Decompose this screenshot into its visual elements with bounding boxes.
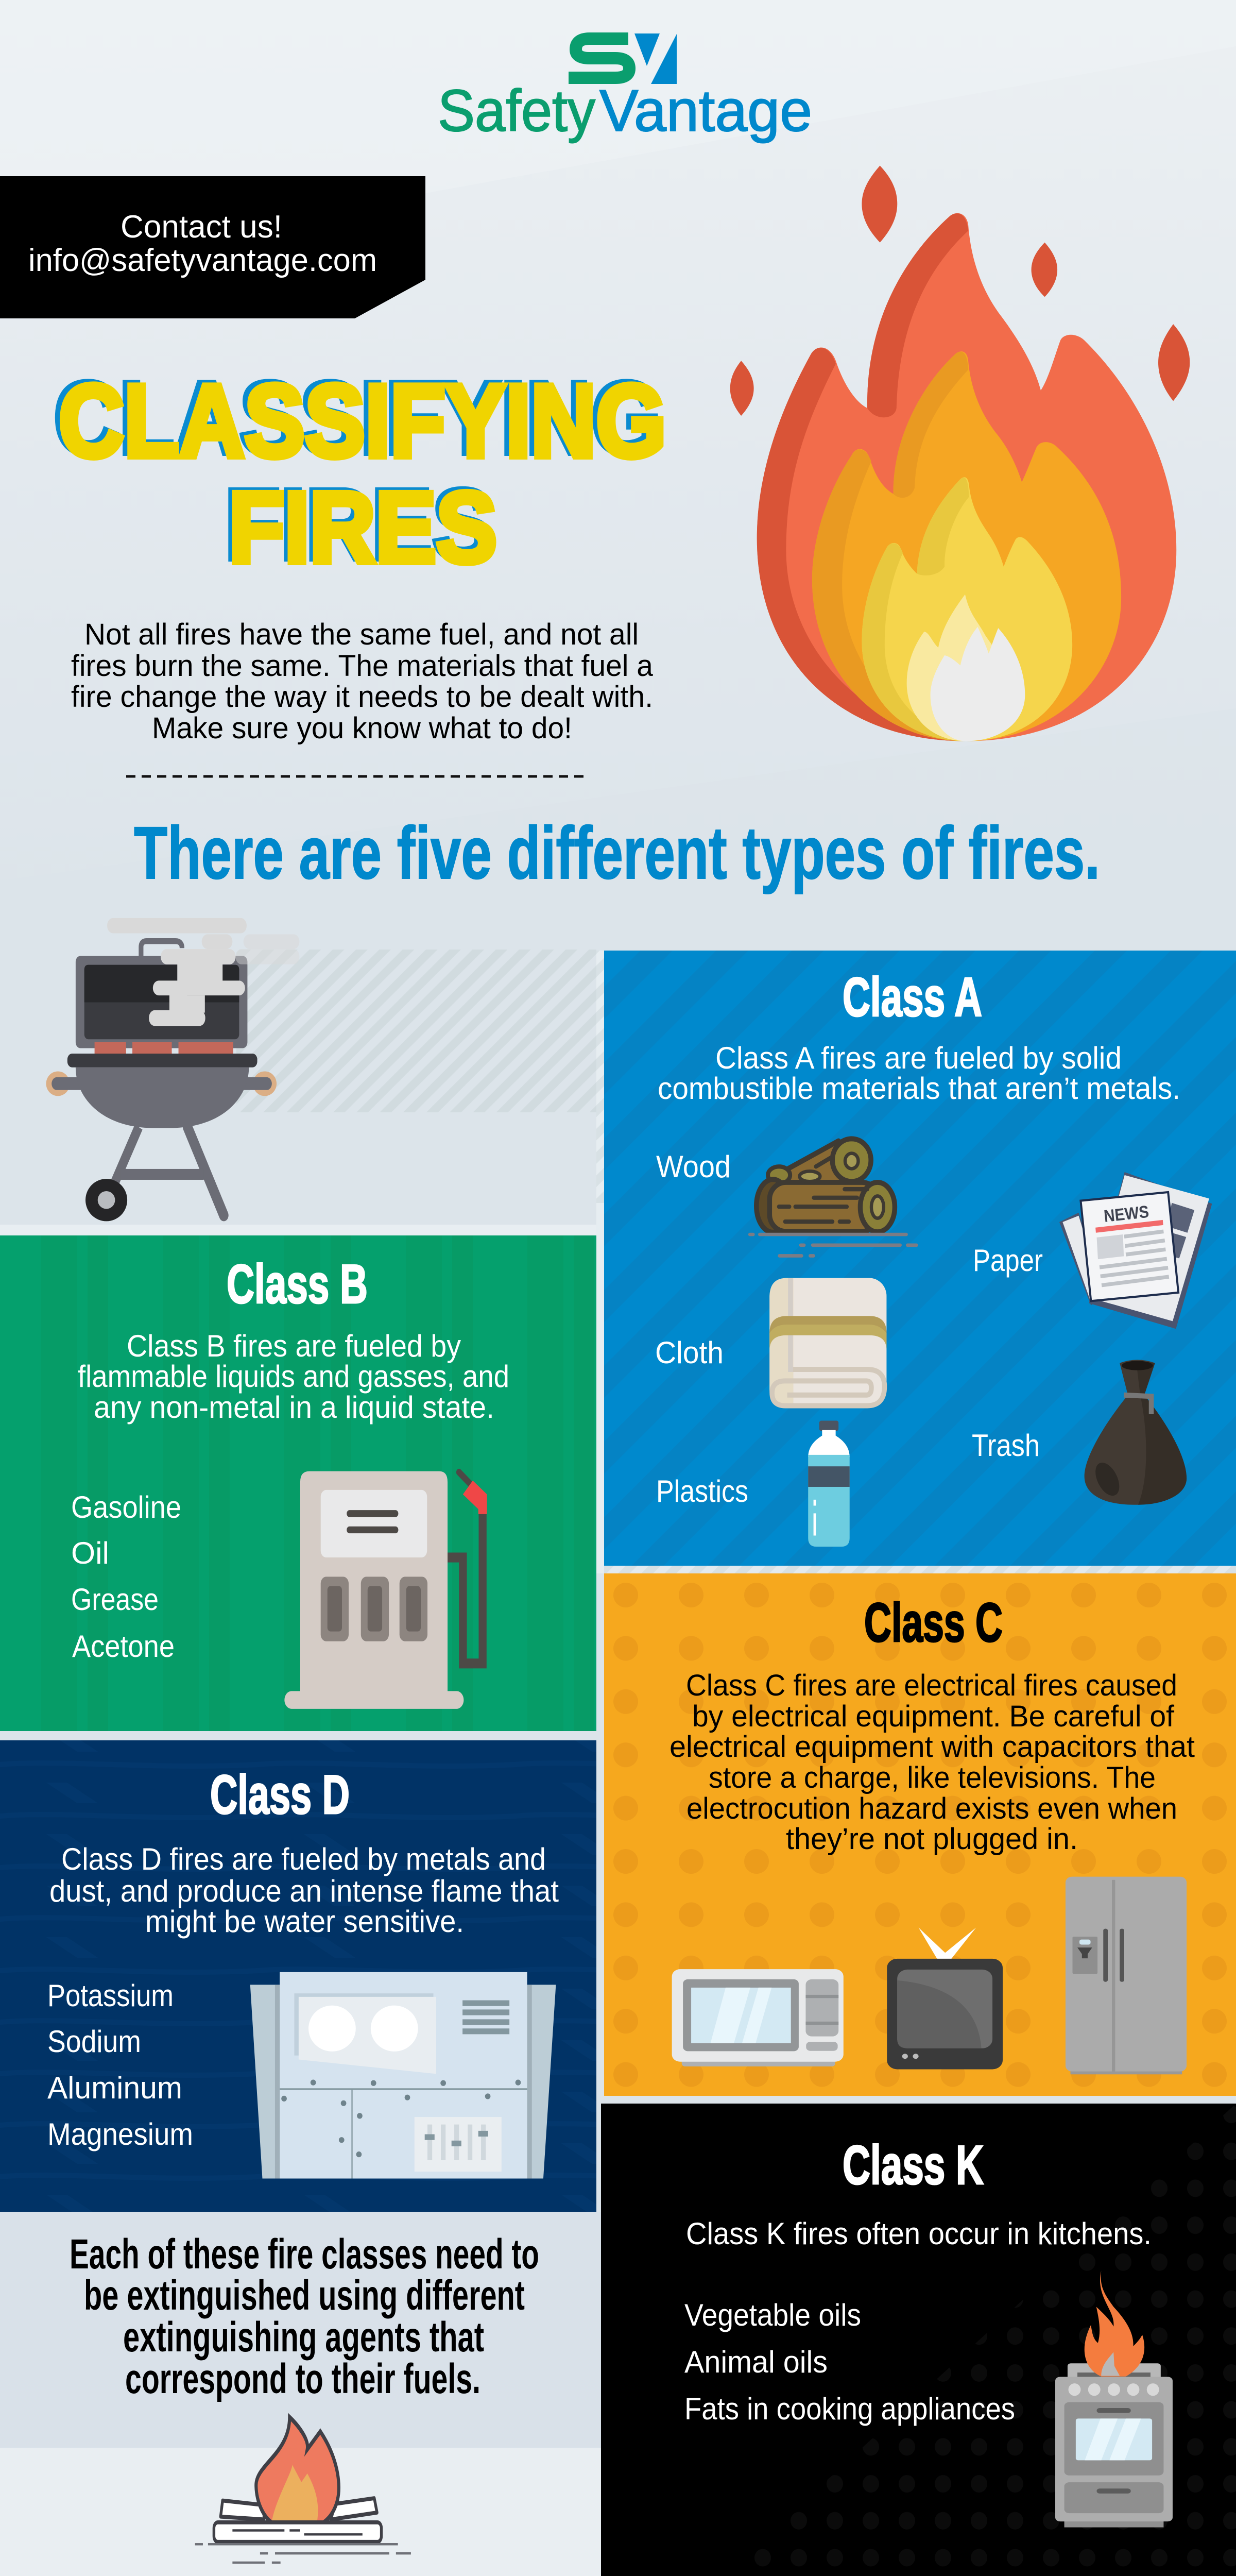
panel: Class A	[604, 951, 1236, 1566]
callout: extinguishing agents: Each of these fire classes need to	[70, 2231, 539, 2278]
icon: fuel pump	[284, 1471, 487, 1709]
title: Classifying Fires	[54, 361, 666, 584]
heading: Class K: Class K	[843, 2134, 984, 2196]
description: Class B: any non-metal in a liquid state.	[94, 1390, 494, 1425]
icon: metal machine	[250, 1972, 556, 2179]
panel: Class C	[604, 1573, 1236, 2096]
title: Classifying Fires: FIRES	[229, 471, 497, 584]
description: Class B: Class B fires are fueled by	[127, 1329, 461, 1363]
logo wordmark	[438, 78, 812, 144]
description: Class K: Class K fires often occur in kitchens.	[686, 2216, 1152, 2251]
icon: newspaper	[1059, 1172, 1212, 1329]
list: Class B fuels: Oil	[71, 1536, 109, 1570]
label: Cloth: Cloth	[655, 1335, 724, 1370]
description: Class A: Class A fires are fueled by solid	[715, 1041, 1122, 1075]
description: Class D: Class D fires are fueled by metals and	[61, 1842, 546, 1876]
title: Classifying Fires: CLASSIFYING	[59, 364, 666, 479]
callout: extinguishing agents: correspond to their fuels.	[125, 2355, 480, 2402]
list: Class B fuels: Gasoline	[71, 1490, 181, 1524]
list: Class D fuels	[47, 1978, 193, 2151]
contact box: top: Contact us!	[121, 209, 282, 245]
list: Class K fuels: Animal oils	[684, 2345, 828, 2379]
description: Class C: they’re not plugged in.	[786, 1822, 1078, 1856]
intro text: Not all fires have the same fuel, and not all	[84, 618, 639, 651]
logo: top	[438, 33, 812, 144]
list: Class K fuels	[684, 2298, 1015, 2426]
icon: television	[887, 1927, 1003, 2069]
icon: folded cloth	[769, 1278, 886, 1408]
description: Class B: flammable liquids and gasses, and	[78, 1359, 509, 1394]
icon: trash bag	[1085, 1360, 1187, 1505]
description: Class C: electrocution hazard exists even when	[686, 1792, 1177, 1825]
list: Class B fuels	[71, 1490, 181, 1664]
label: Trash: Trash	[972, 1428, 1040, 1463]
icon: microwave	[672, 1969, 844, 2066]
contact box: top	[0, 176, 425, 318]
description: Class D	[49, 1842, 559, 1939]
list: Class D fuels: Magnesium	[47, 2117, 193, 2151]
heading: Class A: Class A	[843, 966, 982, 1028]
callout: extinguishing agents: be extinguished using different	[84, 2272, 525, 2319]
heading: Class D: Class D	[210, 1764, 350, 1825]
label: Wood: Wood	[656, 1149, 731, 1184]
logo wordmark: Vantage	[599, 78, 812, 144]
icon: campfire	[195, 2417, 411, 2563]
title: Classifying Fires: FIRES	[225, 468, 493, 581]
icon: logs	[750, 1139, 917, 1256]
intro text: Make sure you know what to do!	[152, 711, 572, 745]
description: Class D: dust, and produce an intense flame that	[49, 1874, 559, 1908]
icon: newspaper: NEWS	[1103, 1202, 1150, 1226]
illustration: grill	[46, 918, 596, 1221]
heading: Class C: Class C	[864, 1591, 1003, 1653]
icon: refrigerator	[1066, 1877, 1187, 2074]
description: Class C: Class C fires are electrical fires caused	[686, 1669, 1177, 1702]
intro text: fires burn the same. The materials that fuel a	[71, 649, 654, 683]
list: Class K fuels: Fats in cooking appliances	[684, 2392, 1015, 2426]
panel: Class K	[601, 2104, 1236, 2576]
icon: SV mark	[569, 33, 677, 84]
title: Classifying Fires: CLASSIFYING	[54, 361, 661, 476]
description: Class A	[658, 1041, 1180, 1106]
list: Class D fuels: Sodium	[47, 2024, 141, 2059]
intro text	[71, 618, 654, 745]
icon: water bottle	[808, 1420, 850, 1547]
description: Class C: electrical equipment with capacitors that	[670, 1730, 1195, 1764]
label: Plastics: Plastics	[656, 1474, 748, 1509]
panel: Class B	[0, 1235, 596, 1731]
description: Class C	[670, 1669, 1195, 1856]
list: Class B fuels: Grease	[71, 1582, 159, 1617]
description: Class C: store a charge, like televisions. The	[709, 1761, 1156, 1794]
list: Class B fuels: Acetone	[72, 1629, 175, 1664]
list: Class D fuels: Aluminum	[47, 2071, 182, 2105]
list: Class D fuels: Potassium	[47, 1978, 174, 2013]
description: Class B	[78, 1329, 509, 1425]
label: Paper: Paper	[973, 1243, 1043, 1278]
logo wordmark: Safety	[438, 78, 595, 144]
description: Class D: might be water sensitive.	[145, 1904, 464, 1939]
heading: Class B: Class B	[227, 1253, 368, 1315]
contact box: top: info@safetyvantage.com	[28, 243, 377, 278]
icon: stove on fire	[1055, 2270, 1173, 2528]
intro text: fire change the way it needs to be dealt with.	[71, 680, 653, 714]
illustration: big flame	[730, 165, 1190, 741]
callout: extinguishing agents	[70, 2231, 539, 2402]
description: Class C: by electrical equipment. Be careful of	[692, 1700, 1175, 1733]
list: Class K fuels: Vegetable oils	[684, 2298, 861, 2332]
description: Class A: combustible materials that aren’t metals.	[658, 1071, 1180, 1106]
panel: Class D	[0, 1740, 596, 2212]
callout: extinguishing agents: extinguishing agents that	[123, 2314, 484, 2361]
